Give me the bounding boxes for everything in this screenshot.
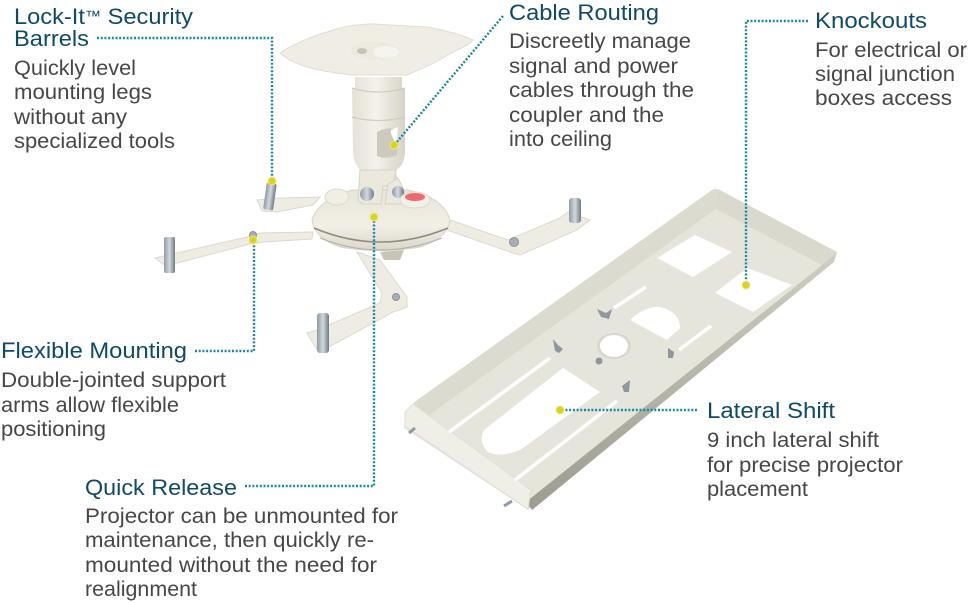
lower hub: [380, 250, 404, 260]
column: [352, 77, 405, 200]
callout: Lateral Shift: [707, 398, 903, 501]
callout: Cable Routing: [509, 0, 694, 151]
dome rim: [314, 228, 448, 242]
lateral shift opening: [482, 368, 600, 455]
description: without any: [13, 106, 128, 129]
description: coupler and the: [509, 104, 664, 127]
leader: lateral shift: [562, 409, 697, 411]
description: placement: [707, 478, 808, 501]
description: [13, 57, 175, 153]
description: 9 inch lateral shift: [707, 429, 879, 452]
callout: Flexible Mounting: [1, 338, 226, 441]
column collar line: [352, 88, 405, 120]
heading: Cable Routing: [509, 0, 659, 25]
description: For electrical or: [815, 39, 967, 62]
tray right wall: [716, 189, 837, 266]
description: into ceiling: [509, 128, 612, 151]
wing nuts: [553, 309, 674, 392]
tray slots: [449, 287, 711, 480]
leader: knockouts: [746, 21, 808, 284]
tray body: [404, 188, 837, 510]
description: [1, 369, 226, 441]
end studs: [409, 428, 512, 506]
heading: Lock-It: [14, 4, 80, 29]
release buttons: [325, 189, 430, 208]
heading: Lateral Shift: [707, 398, 835, 423]
leader: flexible mounting: [195, 241, 254, 351]
mounting tray: [404, 188, 837, 510]
heading: Barrels: [14, 26, 89, 51]
tray upper wall: [413, 190, 718, 416]
description: boxes access: [815, 87, 952, 110]
plate center ring: [351, 42, 399, 60]
description: [509, 30, 694, 151]
column window: [377, 128, 398, 158]
heading: ™: [85, 8, 101, 25]
knuckle bolts: [358, 170, 404, 204]
lower knockout opening: [715, 268, 792, 312]
heading: Flexible Mounting: [1, 338, 187, 363]
upper knockout opening: [657, 235, 732, 277]
description: cables through the: [509, 79, 694, 102]
description: positioning: [1, 418, 106, 441]
description: Discreetly manage: [509, 30, 691, 53]
tray lower wall: [526, 252, 837, 510]
description: signal junction: [815, 63, 955, 86]
threaded posts: [164, 182, 581, 353]
leader: Lock-It barrels: [97, 38, 272, 180]
description: arms allow flexible: [1, 394, 179, 417]
description: [85, 505, 398, 601]
description: realignment: [85, 578, 197, 601]
description: [815, 39, 967, 110]
description: mounted without the need for: [85, 554, 377, 577]
leader: cable routing: [396, 16, 503, 143]
center opening: [630, 307, 680, 340]
callout: Lock-It Security Barrels: [13, 4, 193, 153]
description: Projector can be unmounted for: [85, 505, 398, 528]
projector mount: [155, 24, 590, 353]
heading: Security: [101, 4, 193, 29]
leader: quick release: [245, 218, 374, 486]
heading: Knockouts: [815, 8, 927, 33]
callout: Quick Release: [85, 475, 398, 601]
tray end lip: [405, 404, 531, 509]
heading: Quick Release: [85, 475, 237, 500]
dome base: [312, 190, 450, 250]
description: for precise projector: [707, 454, 903, 477]
callout dots: [249, 141, 750, 414]
description: specialized tools: [14, 130, 175, 153]
description: maintenance, then quickly re-: [85, 529, 374, 552]
ceiling plate: [280, 24, 473, 75]
arm joints: [250, 232, 518, 300]
callout: Knockouts: [815, 8, 967, 110]
description: Quickly level: [14, 57, 136, 80]
heading: [14, 4, 193, 51]
description: [707, 429, 903, 501]
support arms: [155, 197, 590, 350]
cable hole: [597, 333, 631, 359]
description: signal and power: [509, 55, 678, 78]
description: Double-jointed support: [1, 369, 226, 392]
description: mounting legs: [14, 81, 152, 104]
